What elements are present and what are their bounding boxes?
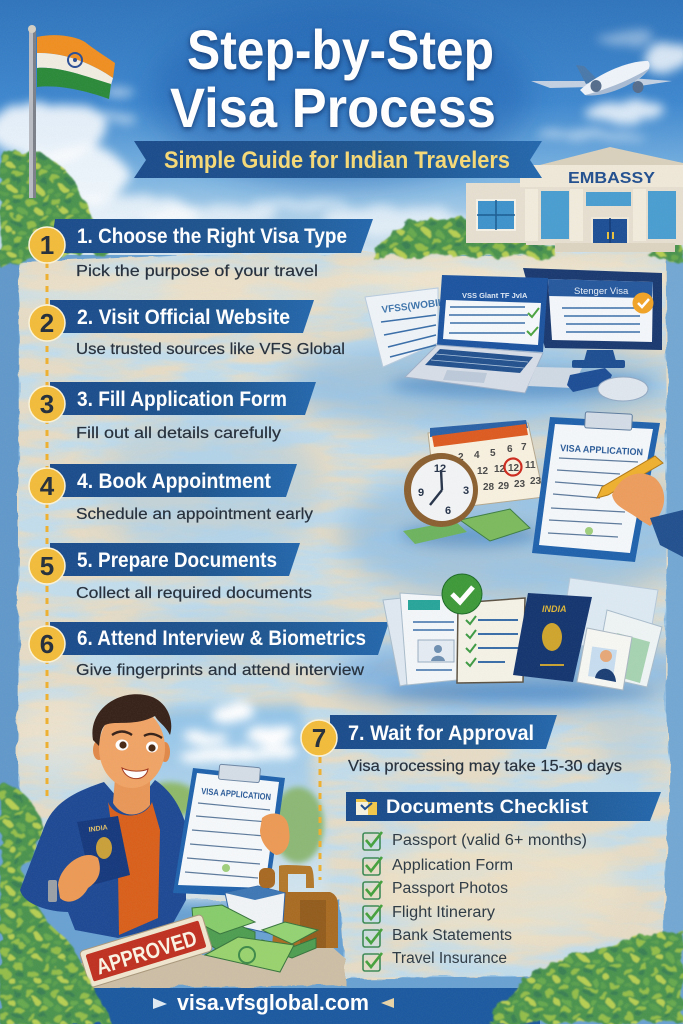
step 4 heading: 4. Book Appointment (77, 469, 271, 493)
calendar: 28 (483, 482, 495, 493)
calendar: 12 (494, 464, 506, 475)
step 5 heading: 5. Prepare Documents (77, 548, 277, 572)
step 5 badge (29, 548, 65, 584)
title (170, 18, 496, 139)
checklist item: bank statements: Bank Statements (392, 927, 512, 944)
step 7 description: Visa processing may take 15-30 days (348, 758, 622, 775)
step 3 heading: 3. Fill Application Form (77, 387, 287, 411)
step 5 (29, 543, 312, 602)
calendar: 11 (525, 460, 536, 471)
flag pole (28, 25, 36, 198)
step 1 heading (50, 219, 373, 253)
step 2 description: Use trusted sources like VFS Global (76, 341, 345, 358)
step 1 badge (29, 227, 65, 263)
checklist heading (346, 792, 661, 821)
keyboard, book and mouse (528, 367, 648, 401)
jacket (20, 780, 186, 938)
calendar: 6 (507, 444, 513, 455)
step 6 description: Give fingerprints and attend interview (76, 662, 364, 679)
checklist notepad (457, 598, 525, 683)
passport: INDIA (542, 604, 566, 614)
calendar: 29 (498, 481, 510, 492)
foliage: right of embassy (650, 234, 683, 262)
calendar (428, 420, 544, 510)
embassy facade (525, 187, 683, 252)
timeline dashed connector (46, 262, 48, 800)
step 1 description: Pick the purpose of your travel (76, 263, 318, 280)
documents checklist panel (346, 792, 661, 971)
step 2 heading (50, 300, 314, 333)
clipboard: VISA APPLICATION (560, 443, 643, 458)
step 4 badge: 4 (40, 471, 55, 501)
embassy sign band (520, 165, 683, 187)
illustration: calendar and clock (403, 420, 544, 544)
step 4 badge (29, 468, 65, 504)
footer strip background (60, 988, 540, 1024)
calendar: 7 (521, 442, 527, 453)
illustration: visa application clipboard (532, 412, 683, 562)
stack right (262, 922, 318, 958)
step 2 badge (29, 305, 65, 341)
checklist item: travel insurance: Travel Insurance (392, 950, 507, 967)
foliage: bottom left bush (0, 921, 110, 1024)
step 1 heading: 1. Choose the Right Visa Type (77, 224, 347, 248)
foliage: mid bushes behind embassy (372, 218, 560, 258)
step 7 connector (318, 757, 322, 880)
checklist item: application form: Application Form (392, 857, 513, 874)
airplane (531, 61, 672, 95)
illustration: computers (365, 268, 662, 401)
arrow left (153, 998, 167, 1009)
step 5 heading (50, 543, 300, 576)
passport held by boy (77, 816, 130, 885)
photo card (577, 628, 632, 690)
step 4 heading (50, 464, 297, 497)
step 6 heading: 6. Attend Interview & Biometrics (77, 626, 366, 650)
parchment panel (0, 240, 683, 990)
clock: 12 (434, 463, 446, 475)
calendar: 4 (474, 450, 480, 461)
loose bill (205, 937, 294, 972)
monitor (523, 268, 662, 368)
laptop: VSS Glant TF JvIA (462, 291, 528, 300)
clouds (0, 31, 683, 237)
money stacks (192, 905, 318, 972)
embassy pediment (536, 147, 683, 170)
clipboard held by boy: VISA APPLICATION (201, 786, 271, 802)
step 7 badge (301, 720, 337, 756)
watch (48, 880, 57, 902)
step 5 description: Collect all required documents (76, 585, 312, 602)
calendar: 23 (514, 479, 526, 490)
green check badge (442, 574, 482, 614)
arrow right (381, 998, 394, 1008)
application forms left (383, 593, 460, 686)
title: Step-by-Step (187, 18, 494, 81)
embassy building (466, 147, 683, 252)
step 6 heading (50, 622, 389, 655)
stone ledge (62, 945, 345, 990)
boy character (20, 694, 290, 938)
step 6 (29, 622, 389, 679)
step 2 badge: 2 (40, 308, 54, 338)
foliage: bottom right (490, 930, 683, 1024)
clipboard held by boy (173, 764, 285, 897)
clipboard (532, 412, 660, 562)
paper behind laptop: VFSS(WOBIL (381, 297, 445, 316)
checklist item: passport: Passport (valid 6+ months) (392, 832, 587, 849)
step 7 heading (330, 715, 557, 749)
flag with pole (28, 25, 115, 198)
suitcase (272, 865, 338, 948)
illustration: documents (383, 574, 662, 690)
calendar: 12 (508, 463, 520, 474)
checklist item: bank statements (363, 927, 512, 947)
step 3 description: Fill out all details carefully (76, 425, 281, 442)
calendar: 5 (490, 448, 496, 459)
step 2 heading: 2. Visit Official Website (77, 305, 290, 329)
hand with pen (597, 456, 683, 557)
clock (404, 453, 478, 527)
left hand (58, 855, 100, 902)
calendar: 2 (458, 452, 464, 463)
step 7 (301, 715, 622, 880)
step 1 (29, 219, 373, 280)
clock: 9 (418, 487, 424, 499)
step 5 badge: 5 (40, 551, 54, 581)
laptop (405, 275, 548, 393)
right hand (260, 814, 290, 855)
icon: folder (356, 799, 377, 815)
clock: 6 (445, 505, 451, 517)
foliage: lower left (0, 784, 110, 1024)
approved stamp plaque: APPROVED (93, 925, 200, 980)
back papers right (560, 578, 662, 687)
step 3 badge: 3 (40, 389, 54, 419)
step 1 badge: 1 (40, 230, 54, 260)
checklist item: passport photos: Passport Photos (392, 880, 508, 897)
clock: 3 (463, 485, 469, 497)
head (92, 694, 171, 788)
checklist item: flight itinerary: Flight Itinerary (392, 904, 495, 921)
checklist item: flight itinerary (363, 904, 495, 923)
footer website: visa.vfsglobal.com (177, 990, 369, 1015)
subtitle ribbon: Simple Guide for Indian Travelers (164, 147, 510, 174)
step 3 (29, 382, 316, 442)
calendar: 12 (477, 466, 489, 477)
foliage: upper left (0, 150, 110, 268)
title: Visa Process (170, 76, 496, 139)
calendar: 23 (530, 476, 542, 487)
step 3 badge (29, 386, 65, 422)
checklist heading: Documents Checklist (386, 797, 589, 818)
step 7 heading: 7. Wait for Approval (348, 721, 534, 745)
soft shadows below illustrations (385, 371, 655, 701)
paper behind laptop (365, 288, 445, 367)
boy backdrop sky scene (70, 703, 325, 900)
step 6 badge (29, 626, 65, 662)
step 4 description: Schedule an appointment early (76, 506, 313, 523)
stack left (192, 905, 255, 952)
neck (113, 778, 150, 815)
passport held by boy: INDIA (88, 824, 108, 834)
step 3 heading (50, 382, 316, 415)
monitor: Stenger Visa (574, 286, 629, 297)
subtitle ribbon (134, 141, 542, 178)
orange t-shirt (108, 802, 160, 935)
step 4 (29, 464, 313, 523)
checklist item: travel insurance (363, 950, 507, 971)
embassy sign band: EMBASSY (568, 170, 655, 187)
box with stamp (225, 868, 285, 936)
step 6 badge: 6 (40, 629, 54, 659)
step 7 badge: 7 (312, 723, 326, 753)
indian flag (37, 35, 115, 99)
step 2 (29, 300, 345, 358)
passport (513, 593, 592, 682)
money under calendar (403, 509, 530, 544)
embassy side wing (466, 183, 526, 243)
